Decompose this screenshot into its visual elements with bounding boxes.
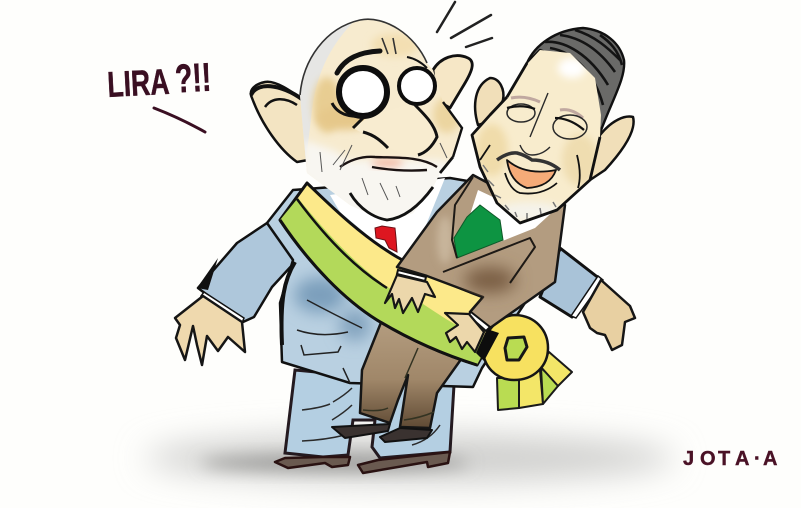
left arm	[198, 223, 300, 322]
glasses	[507, 104, 587, 139]
face outline	[472, 63, 600, 223]
moustache	[497, 153, 560, 170]
right glass	[399, 68, 435, 104]
impact lines	[437, 2, 492, 47]
jaw and chin lines	[350, 157, 453, 220]
left glass	[339, 68, 387, 116]
right arm	[540, 248, 600, 317]
left figure: president	[175, 178, 635, 473]
upper hand	[385, 275, 435, 313]
hair outline	[300, 19, 427, 95]
sash outline bottom	[280, 220, 477, 365]
sash divider	[297, 199, 387, 288]
underline stroke	[154, 108, 205, 132]
shirt	[330, 178, 445, 264]
nose	[353, 103, 437, 155]
trouser creases	[302, 388, 440, 445]
green tie	[454, 205, 503, 258]
rosette	[483, 315, 548, 380]
cheek line	[443, 102, 462, 157]
shoes	[275, 452, 450, 473]
shirt	[456, 190, 558, 258]
lower hand	[445, 313, 484, 352]
right cuff	[571, 276, 603, 318]
sash	[280, 183, 497, 365]
red tie	[375, 226, 397, 252]
forehead lines	[382, 38, 396, 54]
head shading	[476, 58, 598, 222]
exclamation text: ?!!	[174, 56, 212, 101]
right hand	[583, 280, 635, 350]
nose lines	[332, 103, 437, 155]
stubble	[483, 165, 556, 219]
head fill	[300, 19, 462, 222]
black band	[476, 329, 499, 361]
signature: JOTA·A	[683, 448, 777, 470]
hair	[527, 28, 624, 133]
closed eyes	[507, 106, 584, 130]
eyebrows	[337, 51, 380, 73]
nose	[520, 93, 550, 155]
left cuff	[201, 292, 244, 323]
ear left	[475, 78, 503, 125]
jacket shading	[294, 277, 371, 341]
ground shadow	[145, 434, 675, 482]
carried man's head	[472, 28, 634, 223]
hair strands	[545, 30, 622, 105]
right eyebrow	[407, 57, 427, 68]
upper cuff	[397, 270, 426, 281]
left sleeve black accent	[197, 258, 218, 290]
lower cuff	[468, 312, 490, 331]
beard hatching	[320, 143, 447, 200]
rosette ribbons	[497, 352, 572, 410]
head shading	[295, 15, 461, 225]
ear right	[590, 117, 634, 180]
trouser crease	[363, 348, 434, 420]
exclamation text: LIRA	[106, 61, 170, 105]
lapel lines	[443, 177, 535, 283]
eyebrows	[511, 97, 583, 118]
smile outer line	[480, 145, 580, 194]
ear right	[433, 56, 472, 108]
ear left	[251, 82, 308, 162]
ear left inner	[265, 99, 297, 107]
brown legs of carried man	[360, 320, 462, 428]
jacket	[397, 175, 565, 328]
mouth	[340, 157, 437, 171]
president's head	[251, 15, 472, 225]
carried man's shoes	[332, 424, 432, 442]
left hand	[175, 296, 245, 365]
carried man's body	[385, 175, 565, 352]
head fill	[472, 50, 601, 223]
jacket shading	[437, 216, 516, 293]
jacket pocket details	[297, 300, 362, 383]
left side thick line	[282, 262, 295, 345]
ear left top accent	[251, 86, 307, 103]
rosette centre	[505, 337, 527, 360]
sash green band	[280, 198, 490, 365]
trousers	[285, 370, 454, 458]
smile fill	[507, 160, 556, 188]
jacket	[267, 178, 560, 387]
